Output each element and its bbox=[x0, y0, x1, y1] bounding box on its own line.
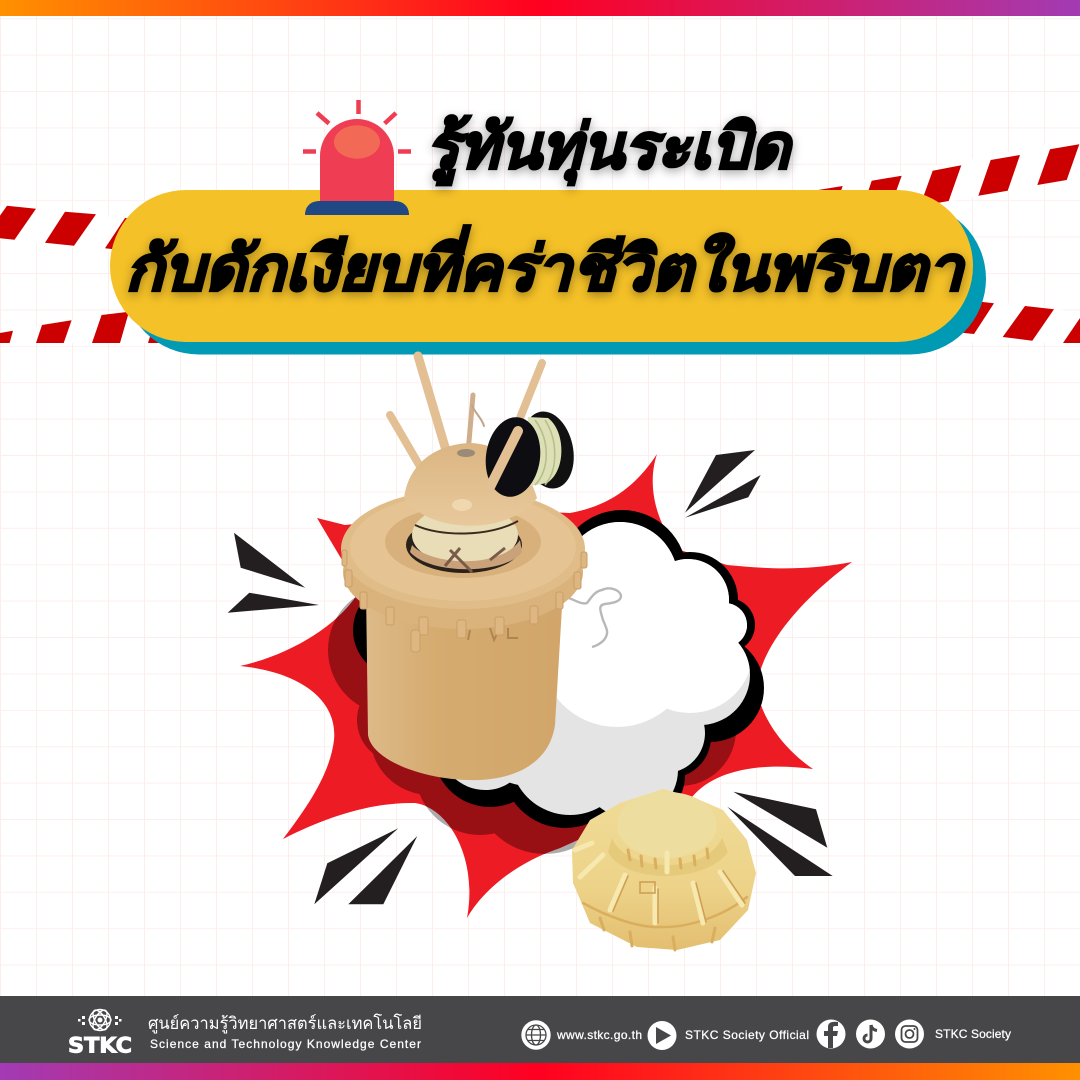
rods behind bbox=[390, 356, 542, 475]
title pill bbox=[110, 190, 986, 354]
icon: play bbox=[648, 1021, 676, 1050]
hazard tape bbox=[0, 138, 1080, 343]
disc mine ribs bbox=[575, 843, 747, 950]
icon: tiktok bbox=[856, 1020, 885, 1048]
rim teeth bbox=[342, 550, 587, 652]
organisation name Thai: ศูนย์ความรู้วิทยาศาสตร์และเทคโนโลยี bbox=[148, 1013, 422, 1034]
dome bbox=[404, 443, 537, 526]
body bbox=[366, 590, 563, 780]
organisation name English: Science and Technology Knowledge Center bbox=[150, 1037, 421, 1051]
icon: siren bbox=[303, 100, 411, 215]
heading line 2: กับดักเงียบที่คร่าชีวิตในพริบตา bbox=[125, 225, 966, 304]
illustration: cylindrical mine bbox=[341, 356, 621, 780]
STKC logo bbox=[68, 1008, 132, 1058]
icon: facebook bbox=[816, 1020, 846, 1048]
icon: globe bbox=[521, 1020, 551, 1050]
recess bbox=[406, 517, 522, 573]
cloud outline bbox=[353, 510, 764, 828]
illustration: disc mine bbox=[572, 789, 756, 950]
youtube name: STKC Society Official bbox=[685, 1028, 809, 1042]
icon: instagram bbox=[895, 1020, 924, 1048]
rim bbox=[343, 515, 583, 629]
explosion burst bbox=[240, 454, 852, 918]
pin wire bbox=[566, 588, 621, 647]
front rod bbox=[490, 431, 518, 487]
embossed marks bbox=[468, 628, 518, 640]
spool bbox=[481, 407, 581, 500]
top gradient bar bbox=[0, 0, 1080, 16]
cloud fill bbox=[456, 522, 750, 815]
action spikes bbox=[228, 450, 833, 904]
footer band bbox=[0, 996, 1080, 1063]
bottom gradient bar bbox=[0, 1063, 1080, 1080]
social name: STKC Society bbox=[935, 1027, 1011, 1041]
STKC logo: STKC bbox=[68, 1034, 132, 1058]
website: www.stkc.go.th bbox=[556, 1028, 642, 1042]
heading line 1: รู้ทันทุ่นระเบิด bbox=[426, 113, 794, 186]
